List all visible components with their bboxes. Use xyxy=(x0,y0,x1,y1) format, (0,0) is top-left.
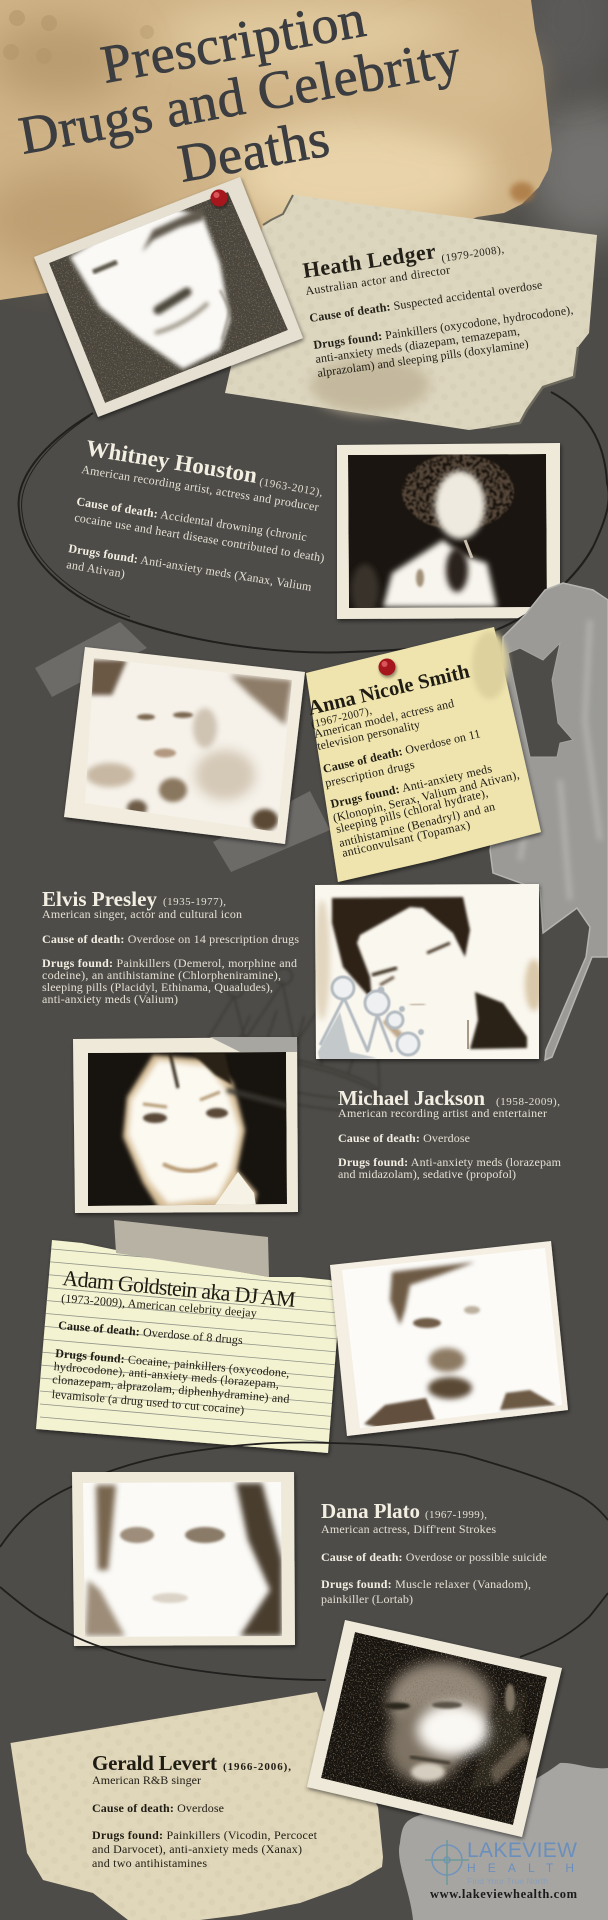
text: Adam Goldstein biography xyxy=(51,1265,297,1417)
text: Dana Plato biography: painkiller (Lortab) xyxy=(321,1592,413,1606)
text: Anna Nicole Smith biography: Cause of death: Overdose on 11 xyxy=(322,726,482,776)
text: Michael Jackson biography: (1958-2009), xyxy=(496,1096,560,1108)
photo: Michael Jackson xyxy=(73,1037,298,1213)
text: Anna Nicole Smith biography: anticonvulsant (Topamax) xyxy=(341,817,471,860)
text: Adam Goldstein biography: clonazepam, alprazolam, diphenhydramine) and xyxy=(52,1372,290,1406)
text: Gerald Levert biography: and two antihistamines xyxy=(92,1856,207,1870)
text: Anna Nicole Smith biography: Drugs found: Anti-anxiety meds xyxy=(329,761,494,811)
text: Elvis Presley biography: anti-anxiety meds (Valium) xyxy=(42,992,178,1006)
text: Gerald Levert biography: Drugs found: Painkillers (Vicodin, Percocet xyxy=(92,1828,318,1842)
text: Whitney Houston biography: American recording artist, actress and producer xyxy=(81,462,320,514)
panel: Anna Nicole Smith yellow note xyxy=(306,627,541,882)
logo: Lakeview Health xyxy=(425,1839,578,1901)
text: Dana Plato biography: (1967-1999), xyxy=(425,1509,487,1521)
decoration: crown outline xyxy=(185,944,410,1123)
text: Heath Ledger biography: anti-anxiety meds (diazepam, temazepam, xyxy=(314,324,520,366)
title: Drugs and Celebrity xyxy=(14,27,465,166)
text: Heath Ledger biography: (1979-2008), xyxy=(441,244,505,265)
text: Dana Plato biography: Cause of death: Overdose or possible suicide xyxy=(321,1550,547,1564)
text: Gerald Levert biography: and Darvocet), anti-anxiety meds (Xanax) xyxy=(92,1842,302,1856)
text: Heath Ledger biography: Heath Ledger xyxy=(301,238,437,283)
hand-drawn oval around Whitney Houston xyxy=(19,392,608,653)
text: Whitney Houston biography: Whitney Houston xyxy=(84,435,259,488)
text: Anna Nicole Smith biography: (1967-2007), xyxy=(310,705,373,731)
icon: red pin xyxy=(210,190,229,209)
panel: Gerald Levert card xyxy=(10,1692,383,1920)
text: Whitney Houston biography: (1963-2012), xyxy=(258,476,324,499)
photo: Heath Ledger xyxy=(34,177,303,417)
text: Anna Nicole Smith biography: antihistamine (Benadryl) and an xyxy=(337,799,496,850)
text: Whitney Houston biography xyxy=(66,435,325,594)
photo: Anna Nicole Smith xyxy=(64,647,305,844)
text: Elvis Presley biography: American singer, actor and cultural icon xyxy=(42,907,242,921)
text: Elvis Presley biography: codeine), an antihistamine (Chlorpheniramine), xyxy=(42,968,281,982)
text: Adam Goldstein biography: Cause of death: Overdose of 8 drugs xyxy=(58,1318,244,1347)
text: Elvis Presley biography: Drugs found: Painkillers (Demerol, morphine and xyxy=(42,956,297,970)
text: Adam Goldstein biography: (1973-2009), American celebrity deejay xyxy=(61,1291,257,1320)
text: Gerald Levert biography: American R&B singer xyxy=(92,1773,201,1787)
panel: Heath Ledger card xyxy=(225,195,597,430)
text: Michael Jackson biography: Drugs found: Anti-anxiety meds (lorazepam xyxy=(338,1155,562,1169)
text: Adam Goldstein biography: levamisole (a drug used to cut cocaine) xyxy=(51,1387,245,1417)
text: Elvis Presley biography xyxy=(42,887,299,1006)
text: Dana Plato biography xyxy=(321,1499,547,1606)
text: Heath Ledger biography: Cause of death: Suspected accidental overdose xyxy=(308,278,543,325)
text: Adam Goldstein biography: Drugs found: Cocaine, painkillers (oxycodone, xyxy=(55,1346,290,1380)
icon: red pin xyxy=(378,658,397,678)
text: Anna Nicole Smith biography: television personality xyxy=(316,717,421,753)
oval stroke over Whitney photo xyxy=(496,547,593,630)
decoration: crown overlay on photo xyxy=(318,977,424,1062)
photo: Elvis Presley xyxy=(314,884,543,1062)
text: Adam Goldstein biography: Adam Goldstein aka DJ AM xyxy=(62,1265,297,1312)
text: Whitney Houston biography: and Ativan) xyxy=(66,557,126,581)
photo: Gerald Levert xyxy=(307,1620,562,1837)
text: Gerald Levert biography: Gerald Levert xyxy=(92,1751,217,1775)
text: Adam Goldstein biography: hydrocodone), anti-anxiety meds (lorazepam, xyxy=(53,1359,280,1391)
photo: Whitney Houston xyxy=(337,443,560,619)
text: Anna Nicole Smith biography: (Klonopin, Serax, Valium and Ativan), xyxy=(331,767,521,825)
logo: Lakeview Health: Find Your True North xyxy=(467,1876,548,1886)
text: Gerald Levert biography: Cause of death: Overdose xyxy=(92,1801,224,1815)
text: Dana Plato biography: Drugs found: Muscle relaxer (Vanadom), xyxy=(321,1577,531,1591)
decoration: tape strips behind Anna Nicole Smith photo xyxy=(35,622,330,872)
oval stroke over Dana photo xyxy=(39,1617,101,1647)
icon: compass crosshair xyxy=(425,1840,469,1885)
text: Gerald Levert biography xyxy=(92,1751,318,1870)
photo: Dana Plato xyxy=(72,1472,295,1646)
panel: Adam Goldstein lined note xyxy=(36,1220,350,1453)
logo: Lakeview Health: LAKEVIEW xyxy=(467,1839,577,1862)
text: Heath Ledger biography: alprazolam) and sleeping pills (doxylamine) xyxy=(316,336,529,380)
text: Elvis Presley biography: Elvis Presley xyxy=(42,887,158,911)
text: Dana Plato biography: Dana Plato xyxy=(321,1499,420,1523)
panel: torn title paper xyxy=(0,0,552,300)
text: Michael Jackson biography: American recording artist and entertainer xyxy=(338,1106,547,1120)
decoration: gray watercolor wash behind logo xyxy=(399,1763,608,1920)
logo: Lakeview Health: HEALTH xyxy=(467,1861,574,1875)
text: Heath Ledger biography: Australian actor and director xyxy=(304,263,451,298)
text: Whitney Houston biography: Cause of death: Accidental drowning (chronic xyxy=(76,494,308,544)
photo: Adam Goldstein xyxy=(330,1241,568,1436)
text: Whitney Houston biography: cocaine use and heart disease contributed to death) xyxy=(74,510,325,565)
hand-drawn oval around Dana Plato xyxy=(0,1443,608,1680)
text: Elvis Presley biography: (1935-1977), xyxy=(163,896,226,908)
text: Heath Ledger biography: Drugs found: Painkillers (oxycodone, hydrocodone), xyxy=(313,303,574,352)
decoration: gray ink splash xyxy=(490,583,608,1060)
text: Anna Nicole Smith biography xyxy=(306,660,521,860)
text: Anna Nicole Smith biography: Anna Nicole Smith xyxy=(306,660,472,720)
text: Gerald Levert biography: (1966-2006), xyxy=(223,1761,291,1773)
text: Michael Jackson biography: and midazolam), sedative (propofol) xyxy=(338,1167,516,1181)
text: Dana Plato biography: American actress, Diff'rent Strokes xyxy=(321,1522,496,1536)
text: Elvis Presley biography: sleeping pills (Placidyl, Ethinama, Quaaludes), xyxy=(42,980,273,994)
text: Michael Jackson biography xyxy=(338,1086,562,1181)
text: Heath Ledger biography xyxy=(301,238,574,380)
text: Michael Jackson biography: Michael Jackson xyxy=(338,1086,485,1110)
text: Elvis Presley biography: Cause of death: Overdose on 14 prescription drugs xyxy=(42,932,299,946)
title: Deaths xyxy=(173,108,334,194)
logo: Lakeview Health: www.lakeviewhealth.com xyxy=(430,1887,578,1901)
text: Anna Nicole Smith biography: sleeping pills (chloral hydrate), xyxy=(334,786,489,836)
text: Anna Nicole Smith biography: American model, actress and xyxy=(313,696,455,741)
text: Whitney Houston biography: Drugs found: Anti-anxiety meds (Xanax, Valium xyxy=(68,541,313,594)
text: Anna Nicole Smith biography: prescription drugs xyxy=(324,757,416,790)
text: Michael Jackson biography: Cause of death: Overdose xyxy=(338,1131,470,1145)
decoration: masking tape xyxy=(114,1220,269,1277)
